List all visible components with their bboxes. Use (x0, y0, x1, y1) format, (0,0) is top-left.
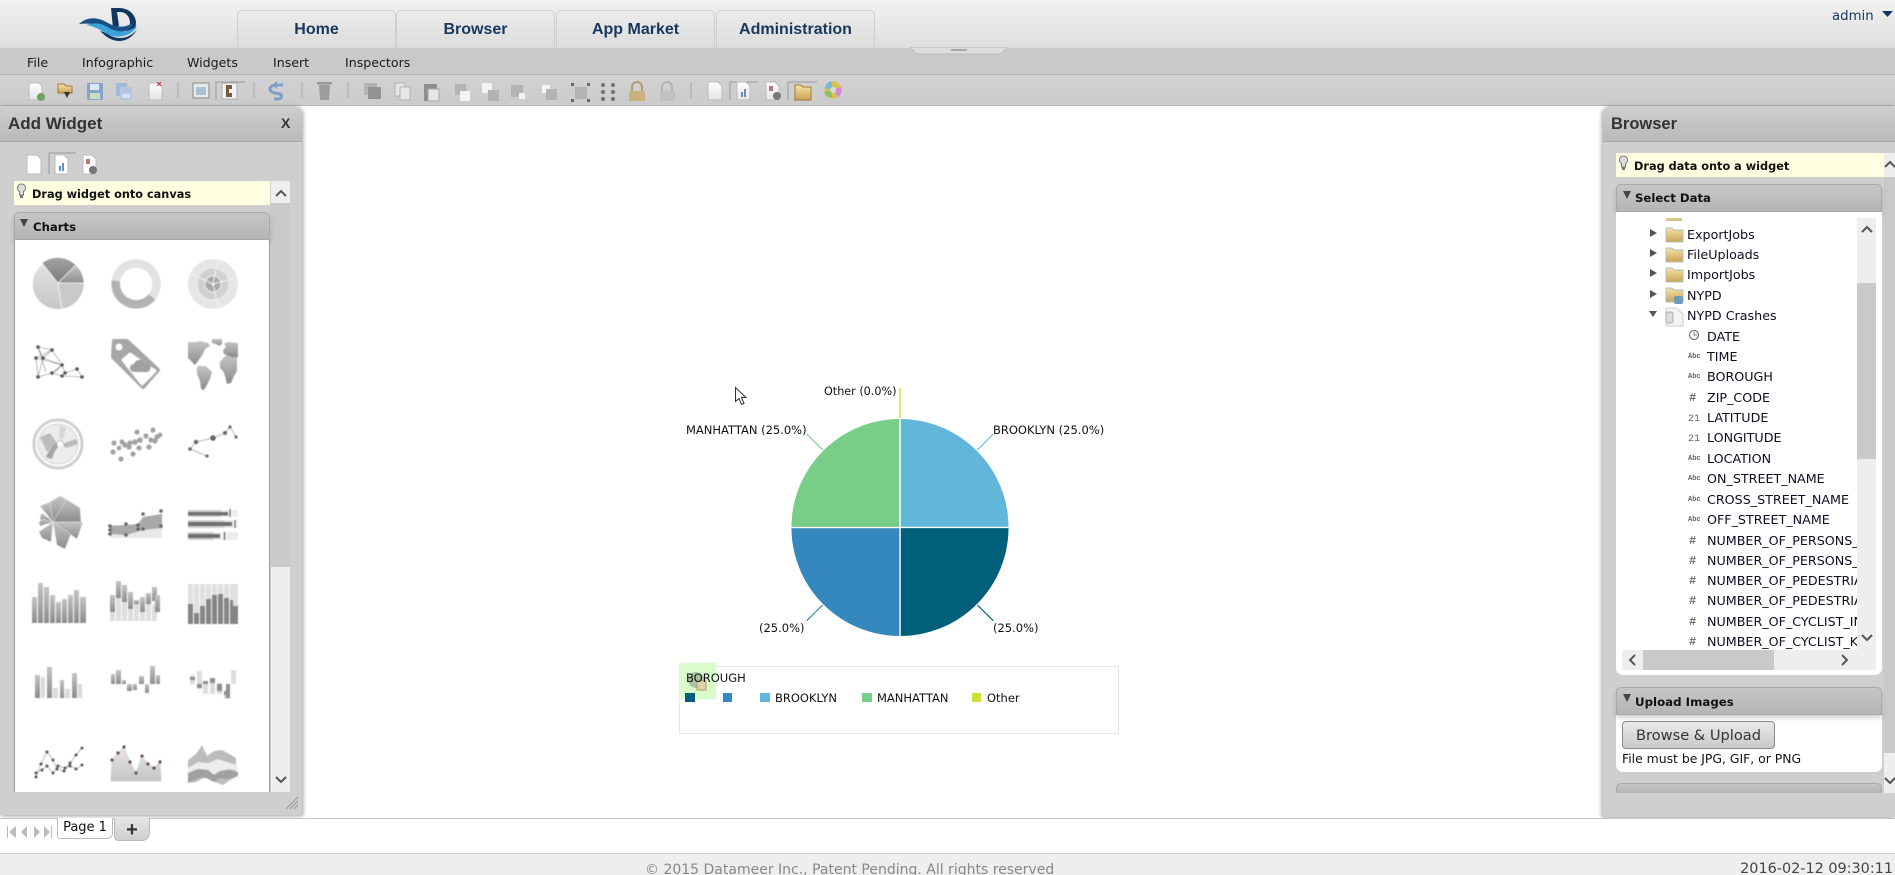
icon: network graph (34, 345, 84, 379)
field type icons: # (1689, 594, 1696, 608)
scroll left arrow (1628, 654, 1636, 666)
page navigation arrows (7, 826, 52, 838)
hint: drag data: Drag data onto a widget (1634, 160, 1789, 173)
button: Browse and Upload: Browse & Upload (1636, 727, 1761, 744)
scroll up arrow (275, 190, 287, 197)
heading: Upload Images (1616, 687, 1882, 715)
label: Other: Other (0.0%) (824, 385, 896, 398)
icon: resize grip (286, 797, 298, 810)
row: ImportJobs: ImportJobs (1687, 267, 1755, 282)
panel: pie chart (679, 385, 1119, 734)
field type icons: Abc (1688, 353, 1701, 361)
icon: 100 percent stacked columns (188, 584, 238, 624)
field type icons: # (1689, 391, 1696, 405)
scrollbar thumb (1643, 650, 1774, 670)
page tab bar (0, 818, 1895, 854)
scroll up arrow (1884, 160, 1895, 168)
scroll down arrow (1861, 634, 1873, 642)
icon: column chart (32, 583, 86, 623)
panel title: Add Widget (8, 114, 102, 133)
label: Manhattan: MANHATTAN (25.0%) (686, 423, 807, 437)
tab: Home (237, 10, 396, 48)
close button: X (281, 115, 290, 131)
footer (0, 853, 1895, 875)
admin user menu: admin (1832, 9, 1874, 24)
icon: floating columns (190, 670, 236, 699)
arrange icons (364, 82, 675, 102)
tab: Page 1: Page 1 (63, 820, 107, 835)
field type icons: # (1689, 554, 1696, 568)
panel title: Browser (1611, 115, 1677, 133)
drag indicator (680, 663, 716, 699)
field type icons: Abc (1688, 516, 1701, 524)
scrollbar thumb (271, 203, 290, 567)
label: Brooklyn: BROOKLYN (25.0%) (993, 423, 1104, 437)
menu: File: File (27, 55, 48, 70)
field type icons: # (1689, 574, 1696, 588)
scroll up arrow (1861, 226, 1873, 233)
icon: grouped columns (35, 667, 82, 698)
widget list right border (269, 240, 270, 792)
pie slices (791, 418, 1009, 637)
row: OFF_STREET_NAME: OFF_STREET_NAME (1707, 512, 1830, 527)
field type icons (1688, 330, 1701, 649)
row: ON_STREET_NAME: ON_STREET_NAME (1707, 471, 1825, 486)
tab: Administration (716, 10, 875, 48)
label: blue slice: (25.0%) (759, 621, 805, 635)
row: BOROUGH: BOROUGH (1707, 369, 1773, 384)
row: LOCATION: LOCATION (1707, 451, 1771, 466)
hint: drag data (1616, 153, 1884, 177)
legend: Other (987, 691, 1020, 705)
scroll right arrow (1841, 654, 1848, 666)
icon: widget tabs (26, 152, 97, 174)
tab: Home: Home (294, 21, 339, 38)
field type icons: # (1689, 534, 1696, 548)
row: TIME: TIME (1707, 349, 1737, 364)
icon: world map (188, 339, 238, 390)
slice: Brooklyn (900, 418, 1009, 528)
field type icons: # (1689, 635, 1696, 649)
legend labels: BROOKLYN (775, 691, 837, 705)
row: LONGITUDE: LONGITUDE (1707, 430, 1782, 445)
header collapse handle (910, 47, 1008, 54)
tab: App Market (556, 10, 715, 48)
row: LATITUDE: LATITUDE (1707, 410, 1768, 425)
icon: connected dots (188, 425, 238, 458)
section: Upload Images (1616, 687, 1882, 772)
field type icons: Abc (1688, 496, 1701, 504)
panel: Browser (1603, 106, 1895, 817)
field type icons: Abc (1688, 373, 1701, 381)
scroll down arrow (275, 776, 287, 784)
tab: Browser (396, 10, 555, 48)
menu: Inspectors: Inspectors (345, 55, 410, 70)
section title: Upload Images (1635, 695, 1734, 709)
icon: pie chart (32, 257, 84, 310)
tab: add page (114, 818, 150, 841)
leader lines (807, 388, 993, 621)
tab: App Market: App Market (592, 21, 679, 38)
tab: Administration: Administration (739, 21, 852, 38)
field type icons: 21 (1688, 414, 1700, 425)
icon: area chart (110, 745, 162, 781)
icon: multi line chart (34, 746, 84, 778)
row: CROSS_STREET_NAME: CROSS_STREET_NAME (1707, 492, 1849, 507)
row: ExportJobs: ExportJobs (1687, 227, 1755, 242)
menu: Widgets: Widgets (187, 55, 238, 70)
icon: stream graph (188, 745, 238, 785)
icon: collapse triangle (20, 219, 28, 227)
icon: admin dropdown arrow (1882, 11, 1893, 17)
icon: positive negative columns (111, 666, 160, 693)
widget list scrollbar (271, 181, 290, 792)
data tree (1616, 212, 1882, 675)
section title: Charts (33, 220, 76, 234)
legend title: BOROUGH (686, 671, 746, 685)
legend swatches (685, 693, 695, 702)
panel title bar (1603, 106, 1895, 142)
panel: Add Widget (0, 106, 302, 815)
field type icons: # (1689, 615, 1696, 629)
chart picker grid (31, 257, 239, 786)
icon: donut chart (116, 264, 156, 304)
slice: unnamed blue (791, 528, 900, 637)
upload note: File must be JPG, GIF, or PNG (1622, 751, 1801, 766)
menu: Insert: Insert (273, 55, 309, 70)
field type icons: Abc (1688, 475, 1701, 483)
view icons (708, 81, 842, 100)
slice: unnamed dark (900, 528, 1009, 637)
file icons (29, 81, 332, 101)
menu: Infographic: Infographic (82, 55, 153, 70)
toolbar (0, 75, 1895, 106)
icon: chord chart (34, 420, 82, 468)
tree horizontal scrollbar (1622, 650, 1876, 670)
chart picker background (15, 240, 269, 792)
icon: lightbulb (16, 184, 26, 198)
scroll down arrow (1884, 777, 1895, 784)
field type icons: 21 (1688, 434, 1700, 445)
tree rows (1649, 218, 1857, 649)
icon: lightbulb (1618, 156, 1628, 170)
icon: scatter plot (110, 427, 162, 462)
row: DATE: DATE (1707, 329, 1740, 344)
browser panel scrollbar (1884, 153, 1895, 793)
icon: mouse cursor (736, 388, 746, 404)
tree vertical scrollbar (1857, 218, 1876, 650)
legend: MANHATTAN (877, 691, 948, 705)
logo (79, 8, 137, 41)
tab: add page: + (126, 819, 138, 841)
tab: Browser: Browser (443, 21, 508, 38)
icon: tag with cloud (113, 341, 158, 387)
row: ZIP_CODE: ZIP_CODE (1707, 390, 1770, 405)
menu bar (0, 48, 1895, 75)
tree arrows (1649, 229, 1657, 317)
hint: drag widget: Drag widget onto canvas (32, 188, 191, 201)
label: dark slice: (25.0%) (993, 621, 1039, 635)
section title: Select Data (1635, 191, 1711, 205)
scrollbar thumb (1884, 177, 1895, 753)
row: NYPD Crashes: NYPD Crashes (1687, 308, 1777, 323)
button: Browse and Upload (1622, 721, 1775, 749)
widget list border (14, 240, 15, 792)
slice: Manhattan (791, 418, 900, 528)
toolbar icons (28, 81, 842, 102)
icon: nested radial chart (188, 259, 238, 309)
folder icons (1666, 217, 1683, 326)
field type icons: Abc (1688, 455, 1701, 463)
top header bar (0, 0, 1895, 48)
icon: collapse triangle (1623, 694, 1631, 702)
row: FileUploads: FileUploads (1687, 247, 1759, 262)
tab: Page 1 (57, 818, 113, 839)
icon: stacked columns (110, 581, 160, 621)
hint: drag widget (14, 181, 270, 205)
row: NYPD: NYPD (1687, 288, 1722, 303)
legend (680, 663, 1118, 734)
icon: polar area chart (39, 496, 83, 549)
panel title bar (0, 106, 302, 142)
scrollbar thumb (1857, 283, 1876, 459)
icon: bullet chart (188, 509, 238, 540)
icon: range area chart (108, 509, 163, 538)
heading: Select Data (1616, 184, 1882, 212)
heading: Charts (14, 212, 270, 240)
section: clipped next header (1616, 783, 1882, 793)
icon: collapse triangle (1623, 191, 1631, 199)
